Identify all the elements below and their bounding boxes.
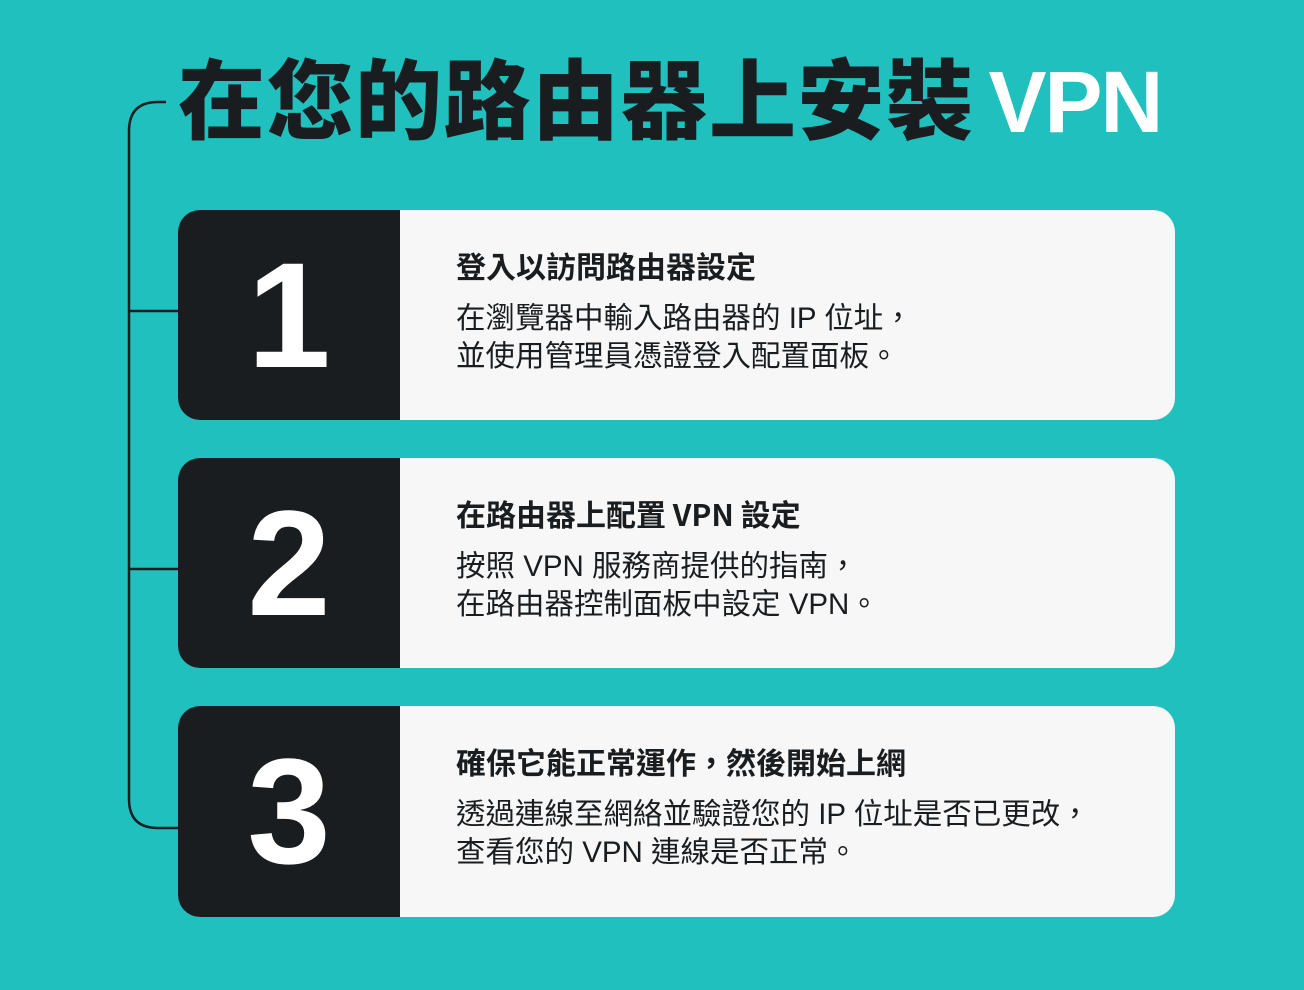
text: step 3	[456, 739, 1090, 869]
panel: step 1	[178, 210, 1175, 420]
text: step 3: 確保它能正常運作，然後開始上網	[456, 739, 906, 783]
text: step 2	[456, 491, 879, 621]
number 1	[178, 210, 400, 420]
panel: step 3	[178, 706, 1175, 917]
text: step 3: 透過連線至網絡並驗證您的 IP 位址是否已更改，	[456, 798, 1090, 831]
panel: step 2	[178, 458, 1175, 668]
text: step 1	[456, 243, 913, 373]
text: step 3: 查看您的 VPN 連線是否正常。	[456, 836, 858, 869]
number 3: 3	[247, 727, 331, 895]
text: step 1: 並使用管理員憑證登入配置面板。	[456, 340, 899, 373]
number 3	[178, 706, 400, 917]
text: step 1: 在瀏覽器中輸入路由器的 IP 位址，	[456, 302, 913, 335]
number 1: 1	[247, 230, 331, 398]
title: 在您的路由器上安裝VPN	[178, 32, 1161, 158]
text: step 1: 登入以訪問路由器設定	[456, 243, 756, 287]
text: step 2: 在路由器控制面板中設定 VPN。	[456, 588, 879, 621]
text: step 2: 在路由器上配置 VPN 設定	[456, 491, 801, 535]
number 2: 2	[247, 478, 331, 646]
number 2	[178, 458, 400, 668]
text: step 2: 按照 VPN 服務商提供的指南，	[456, 550, 858, 583]
